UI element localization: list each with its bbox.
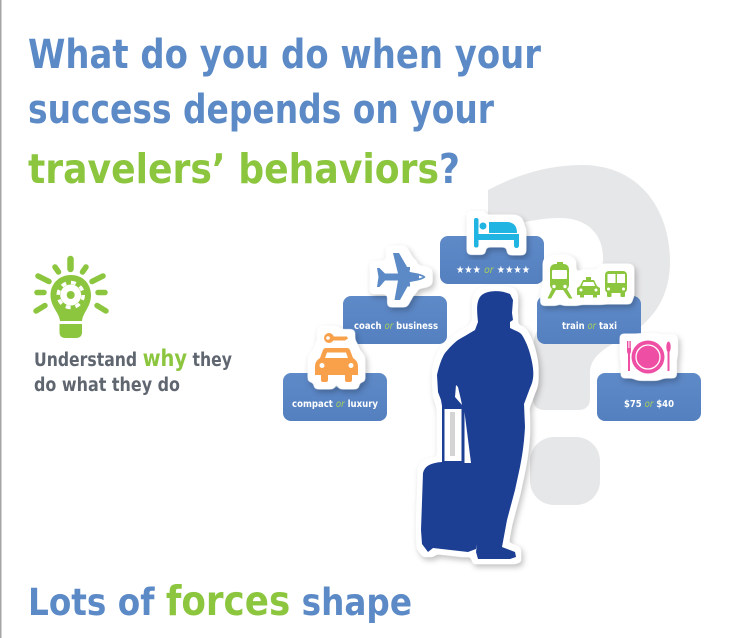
card: compact or luxury: compact or luxury bbox=[292, 399, 378, 410]
title: success depends on your bbox=[28, 87, 494, 133]
card: hotel stars bbox=[440, 236, 544, 284]
card: train or taxi bbox=[537, 296, 641, 344]
card: coach or business: coach or business bbox=[354, 321, 438, 332]
icon: train, taxi and bus bbox=[548, 262, 627, 298]
card: hotel stars: ★★★ or ★★★★ bbox=[456, 265, 530, 276]
text: understand why: do what they do bbox=[34, 375, 180, 396]
text: understand why: Understand why they bbox=[34, 346, 232, 372]
bottom heading: Lots of forces shape bbox=[28, 577, 412, 625]
card: train or taxi: train or taxi bbox=[562, 321, 617, 332]
title bbox=[28, 32, 541, 193]
icon: lightbulb with gear bbox=[36, 259, 106, 338]
icon: bed bbox=[474, 218, 519, 248]
card: price bbox=[597, 373, 701, 421]
traveler silhouette with suitcase bbox=[421, 291, 533, 559]
icon: airplane bbox=[377, 253, 426, 300]
title: travelers’ behaviors? bbox=[28, 145, 460, 193]
title: What do you do when your bbox=[28, 32, 541, 78]
text: understand why bbox=[34, 346, 232, 396]
card: coach or business bbox=[343, 296, 447, 344]
card: price: $75 or $40 bbox=[624, 399, 674, 410]
card: compact or luxury bbox=[283, 373, 387, 421]
question mark background bbox=[488, 165, 670, 505]
icon: car with key bbox=[315, 333, 358, 382]
icon: plate and cutlery bbox=[627, 340, 671, 374]
